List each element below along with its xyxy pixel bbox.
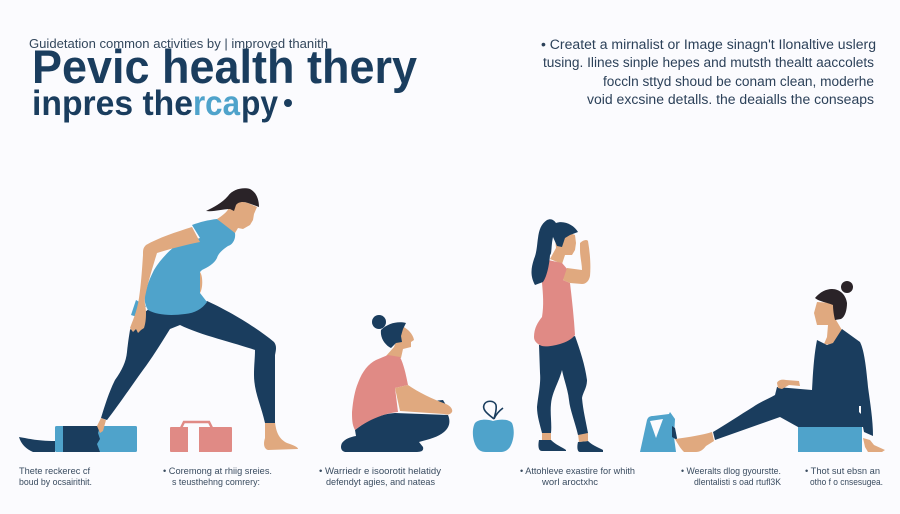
figure: seated woman with bun: [341, 315, 452, 452]
foot: [675, 432, 714, 452]
text block: top right description: foccln sttyd shoud be conam clean, moderhe: [603, 74, 874, 89]
subtitle: Guidetation common activities by | improved thanith: [29, 36, 328, 51]
caption 5: • Weeralts dlog gyourstte.: [681, 466, 781, 477]
shoes: [538, 440, 566, 451]
head and neck: [217, 200, 257, 233]
neck and face: [550, 233, 576, 264]
caption 1: boud by ocsairithit.: [19, 477, 92, 488]
caption 2: [163, 466, 272, 488]
caption 5: dlentalisti s oad rtufl3K: [694, 477, 782, 488]
leggings: [101, 301, 276, 423]
neck and face: [386, 326, 414, 358]
caption 4: worl aroctxhc: [541, 477, 598, 488]
text block: top right description: [541, 37, 876, 107]
highlight on arm: [859, 406, 861, 414]
text block: top right description: void excsine detalls. the deaialls the conseaps: [587, 92, 874, 107]
figure: standing woman with ponytail: [532, 219, 603, 452]
caption 4: [520, 466, 635, 488]
icon: apple: [473, 401, 514, 452]
shirt: [145, 219, 235, 315]
title: Pevic health thery: [32, 40, 417, 93]
hair: [206, 188, 259, 211]
caption 1: [19, 466, 92, 488]
skin sliver at waist: [200, 272, 202, 293]
caption 2: • Coremong at rhiig sreies.: [163, 466, 272, 477]
title: py: [241, 84, 278, 123]
title: rca: [193, 84, 240, 123]
shirt: [534, 260, 575, 346]
leggings: [537, 336, 588, 435]
captions row: [19, 466, 883, 488]
hair: [841, 281, 853, 293]
icon: blue wedge with foot: [640, 412, 677, 452]
neck and face: [814, 302, 842, 345]
hair: [372, 315, 386, 329]
icon: pink bag: [170, 422, 232, 452]
text block: top right description: tusing. Ilines sinple hepes and mutsth thealtt aaccolets: [543, 55, 874, 70]
caption 6: • Thot sut ebsn an: [805, 466, 880, 477]
caption 3: • Warriedr e isoorotit helatidy: [319, 466, 441, 477]
arm: [563, 240, 590, 284]
title: [32, 40, 417, 123]
hand on knee: [777, 380, 800, 389]
shirt: [352, 355, 408, 430]
arm: [130, 227, 200, 333]
yoga block with foot: [19, 418, 137, 452]
caption 4: • Attohleve exastire for whith: [520, 466, 635, 477]
arm: [433, 400, 446, 405]
body and leg: [713, 329, 873, 440]
figure: woman lunging: [101, 188, 298, 450]
title: inpres the: [32, 84, 193, 123]
hand on block: [863, 438, 885, 452]
caption 6: [805, 466, 883, 488]
shirt hem behind hand: [131, 300, 146, 318]
caption 3: defendyt agies, and nateas: [326, 477, 435, 488]
block: [798, 427, 862, 452]
leggings: [341, 413, 449, 452]
rear foot: [264, 422, 298, 450]
caption 2: s teusthehng comrery:: [172, 477, 260, 488]
caption 3: [319, 466, 441, 488]
caption 6: otho f o cnsesugea.: [810, 477, 883, 488]
figure: woman seated on block: [675, 281, 885, 452]
caption 5: [681, 466, 782, 488]
hair: [532, 219, 578, 285]
text block: top right description: • Createt a mirnalist or Image sinagn't Ilonaltive uslerg: [541, 37, 876, 52]
caption 1: Thete reckerec cf: [19, 466, 90, 477]
